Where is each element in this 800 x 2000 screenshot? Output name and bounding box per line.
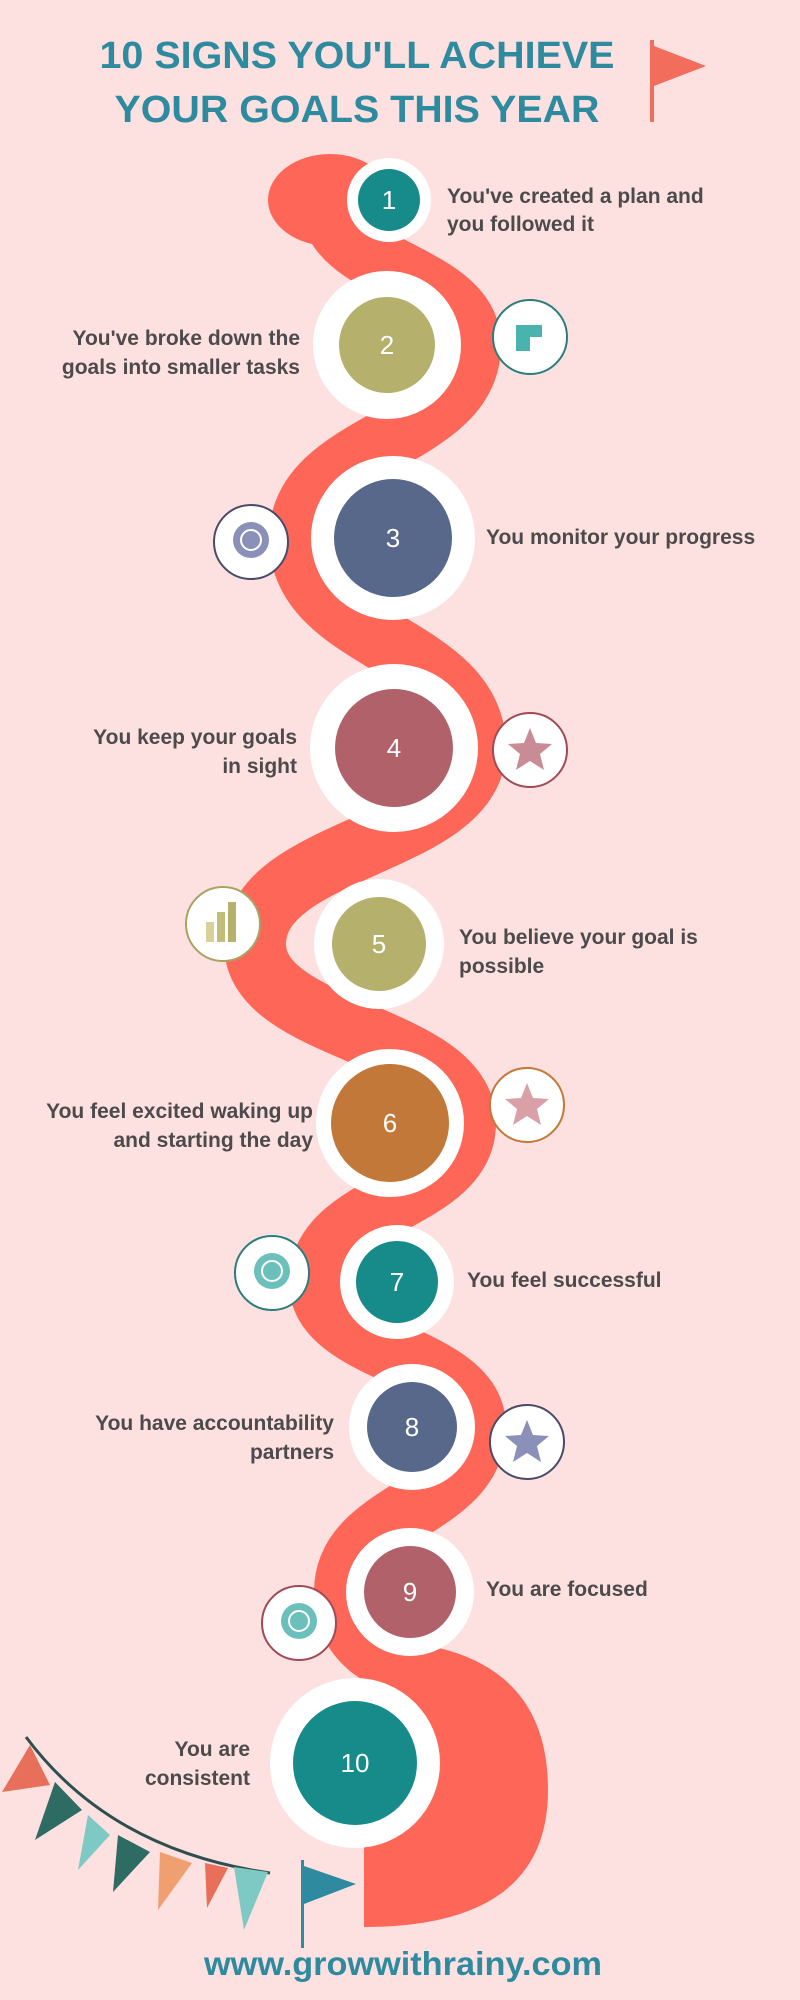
winding road — [255, 154, 548, 1927]
step 9: You are focused — [486, 1578, 648, 1601]
step 1: you followed it — [447, 213, 594, 236]
step 1 — [347, 158, 704, 242]
step 9: 9 — [403, 1577, 417, 1607]
title — [100, 35, 614, 131]
step 2: 2 — [380, 330, 394, 360]
step 3: You monitor your progress — [486, 526, 755, 549]
step 10: consistent — [145, 1767, 250, 1790]
icon: bottom flag — [301, 1860, 356, 1948]
step 6 — [46, 1049, 464, 1197]
icon: target 9 — [262, 1586, 336, 1660]
step 2 — [62, 271, 461, 419]
step 8: partners — [250, 1441, 334, 1464]
step 3 — [311, 456, 755, 620]
step 7: You feel successful — [467, 1269, 662, 1292]
step 5: possible — [459, 955, 544, 978]
step 3: 3 — [386, 523, 400, 553]
step 8 — [95, 1364, 475, 1490]
step 1: You've created a plan and — [447, 185, 704, 208]
step 9 — [346, 1528, 648, 1656]
step 7: 7 — [390, 1267, 404, 1297]
step 4: 4 — [387, 733, 401, 763]
step 4: You keep your goals — [93, 726, 297, 749]
step 6: You feel excited waking up — [46, 1100, 313, 1123]
icon: top flag — [650, 40, 706, 122]
icon: star 8 — [490, 1405, 564, 1479]
step 8: 8 — [405, 1412, 419, 1442]
step 6: 6 — [383, 1108, 397, 1138]
website url: www.growwithrainy.com — [203, 1945, 602, 1982]
bunting — [2, 1737, 270, 1930]
icon: target 3 — [214, 505, 288, 579]
step 5 — [314, 879, 698, 1009]
icon: bars 5 — [186, 887, 260, 961]
step 7 — [340, 1225, 662, 1339]
step 1: 1 — [382, 185, 396, 215]
step 2: goals into smaller tasks — [62, 356, 300, 379]
step 8: You have accountability — [95, 1412, 334, 1435]
step 5: You believe your goal is — [459, 926, 698, 949]
icon: star 6 — [490, 1068, 564, 1142]
step 2: You've broke down the — [73, 327, 300, 350]
step 4: in sight — [222, 755, 297, 778]
icon: target 7 — [235, 1236, 309, 1310]
step 5: 5 — [372, 929, 386, 959]
step 6: and starting the day — [113, 1129, 313, 1152]
step 4 — [93, 664, 478, 832]
title: 10 SIGNS YOU'LL ACHIEVE — [100, 35, 614, 77]
title: YOUR GOALS THIS YEAR — [114, 89, 600, 131]
step 10: 10 — [341, 1748, 369, 1778]
icon: star 4 — [493, 713, 567, 787]
step 10: You are — [175, 1738, 250, 1761]
icon: chart 2 — [493, 300, 567, 374]
step 10 — [145, 1678, 440, 1848]
